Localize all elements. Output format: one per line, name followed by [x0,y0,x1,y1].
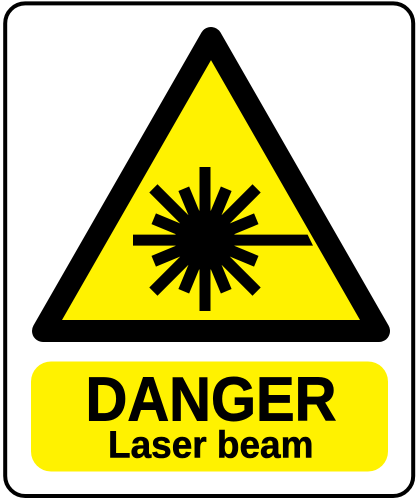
subheading: Laser beam: Laser beam [108,424,314,466]
text panel [31,362,388,472]
heading: DANGER: DANGER [86,366,336,434]
icon: laser starburst [133,167,313,311]
warning triangle [43,38,379,331]
